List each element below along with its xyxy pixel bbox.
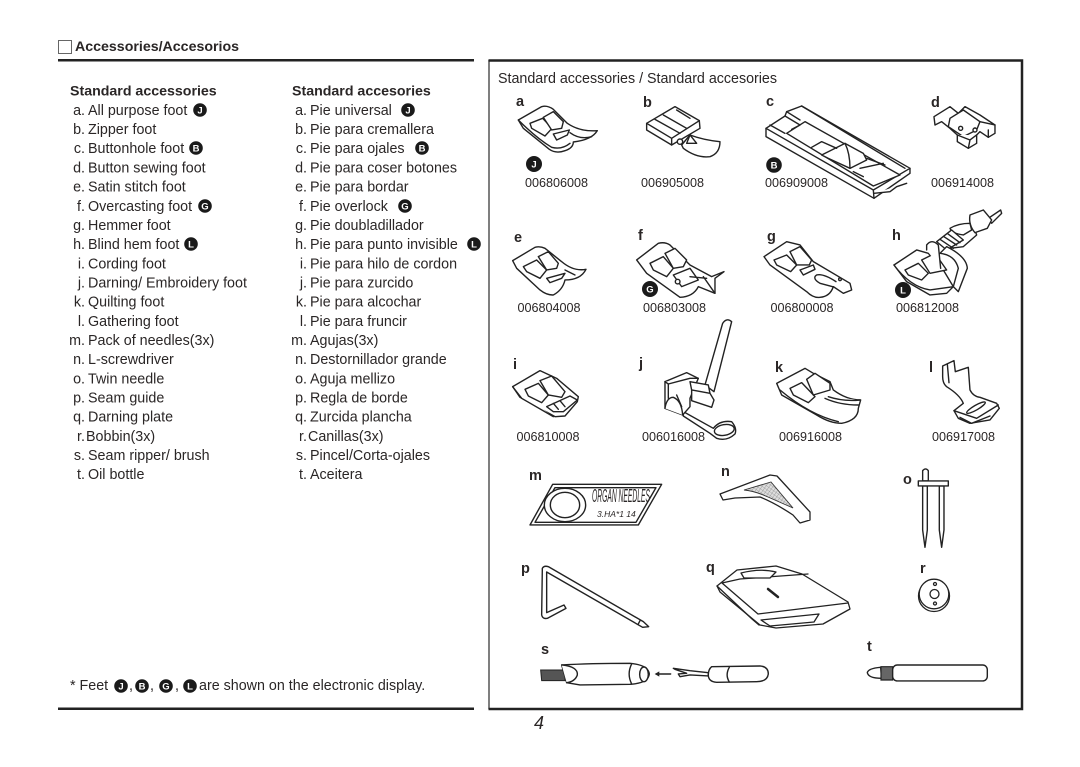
panel: standard accessories illustrations: ORGAN NEEDLES (592, 486, 650, 506)
item d: button sewing foot: 006914008 (931, 176, 994, 190)
item e: satin stitch foot: e (514, 230, 522, 246)
item g: hemmer foot: g (767, 229, 776, 245)
list: Spanish accessories: s. (296, 448, 307, 464)
list: English accessories: Bobbin(3x) (86, 429, 155, 445)
list: English accessories: Zipper foot (88, 122, 156, 138)
page number: 4 (534, 713, 544, 733)
badge L: L (900, 286, 906, 296)
item h: blind hem foot: 006812008 (896, 301, 959, 315)
list: English accessories: L-screwdriver (88, 352, 174, 368)
list: Spanish accessories: r. (299, 429, 307, 445)
list: English accessories: Darning plate (88, 410, 173, 426)
item b: zipper foot: b (643, 95, 652, 111)
list: English accessories: Satin stitch foot (88, 180, 186, 196)
panel: standard accessories illustrations (488, 60, 1022, 709)
list: Spanish accessories: p. (295, 390, 307, 406)
list: Spanish accessories: Aguja mellizo (310, 372, 395, 388)
list: Spanish accessories: i. (300, 256, 307, 272)
top rule (58, 59, 474, 62)
list: Spanish accessories: Pie para punto invisible (310, 237, 458, 253)
list: Spanish accessories: Pie overlock (310, 199, 389, 215)
item n: L-screwdriver: n (721, 464, 730, 480)
item b: zipper foot (641, 95, 720, 190)
list: English accessories: Pack of needles(3x) (88, 333, 214, 349)
list: Spanish accessories: c. (296, 141, 307, 157)
list: Spanish accessories: Pie para hilo de cordon (310, 256, 457, 272)
list: Spanish accessories: Standard accesories (292, 84, 431, 100)
list: English accessories: b. (73, 122, 85, 138)
list: Spanish accessories: k. (296, 294, 307, 310)
list: English accessories: s. (74, 448, 85, 464)
list: English accessories: e. (73, 180, 85, 196)
footnote: B (139, 682, 146, 692)
list: English accessories: a. (73, 103, 85, 119)
list: Spanish accessories (291, 84, 481, 483)
list: English accessories: g. (73, 218, 85, 234)
item d: button sewing foot (931, 95, 995, 190)
item q: darning plate: q (706, 560, 715, 576)
item l: gathering foot: l (929, 360, 933, 376)
item i: cording foot: 006810008 (516, 430, 580, 444)
list: English accessories: i. (78, 256, 85, 272)
list: English accessories: B (193, 144, 200, 154)
list: English accessories: Gathering foot (88, 314, 179, 330)
list: English accessories: t. (77, 467, 85, 483)
badge B: B (771, 160, 778, 172)
item j: darning/embroidery foot: 006016008 (642, 430, 705, 444)
item f: overcasting foot: f (638, 228, 643, 244)
list: English accessories: Oil bottle (88, 467, 144, 483)
list: English accessories: Standard accessories (70, 84, 217, 100)
item m: pack of needles: 3.HA*1 14 (597, 509, 636, 519)
item i: cording foot (513, 357, 580, 444)
list: Spanish accessories: j. (299, 276, 307, 292)
list: English accessories: Hemmer foot (88, 218, 171, 234)
list: Spanish accessories: Canillas(3x) (308, 429, 383, 445)
list: Spanish accessories: b. (295, 122, 307, 138)
item m: pack of needles (529, 468, 662, 525)
list: English accessories: j. (77, 276, 85, 292)
list: English accessories: Seam ripper/ brush (88, 448, 210, 464)
list: Spanish accessories: d. (295, 160, 307, 176)
list: Spanish accessories: o. (295, 372, 307, 388)
item f: overcasting foot (637, 228, 724, 315)
item j: darning/embroidery foot: j (638, 356, 643, 372)
list: Spanish accessories: B (419, 144, 426, 154)
list: Spanish accessories: Pie para alcochar (310, 294, 422, 310)
item g: hemmer foot: 006800008 (770, 301, 834, 315)
item d: button sewing foot: d (931, 95, 940, 111)
heading: accessories: Accessories/Accesorios (75, 39, 239, 55)
footnote: are shown on the electronic display. (199, 678, 425, 694)
item k: quilting foot: k (775, 360, 784, 376)
item l: gathering foot: 006917008 (932, 430, 995, 444)
list: English accessories: J (197, 106, 203, 116)
list: English accessories: q. (73, 410, 85, 426)
list: English accessories: L (188, 240, 194, 250)
item c: buttonhole foot: c (766, 94, 774, 110)
list: Spanish accessories: Pie doubladillador (310, 218, 424, 234)
list: English accessories: o. (73, 372, 85, 388)
item t: oil bottle: t (867, 639, 872, 655)
list: Spanish accessories: Zurcida plancha (310, 410, 412, 426)
footnote: , (129, 678, 133, 694)
list: English accessories: c. (74, 141, 85, 157)
list: English accessories (69, 84, 247, 483)
list: English accessories: h. (73, 237, 85, 253)
item q: darning plate (706, 560, 850, 628)
list: English accessories: k. (74, 294, 85, 310)
item n: L-screwdriver (720, 464, 810, 523)
item c: buttonhole foot (765, 94, 910, 198)
list: English accessories: r. (77, 429, 85, 445)
item i: cording foot: i (513, 357, 517, 373)
footnote: J (118, 682, 124, 692)
list: English accessories: f. (77, 199, 85, 215)
item k: quilting foot (775, 360, 861, 444)
item p: seam guide (521, 561, 649, 627)
list: Spanish accessories: Pie para bordar (310, 180, 409, 196)
item o: twin needle: o (903, 472, 912, 488)
footnote: G (162, 682, 170, 692)
list: English accessories: Seam guide (88, 390, 164, 406)
item a: all purpose foot: a (516, 94, 525, 110)
list: Spanish accessories: Destornillador grande (310, 352, 447, 368)
item a: all purpose foot (516, 94, 597, 190)
item f: overcasting foot: 006803008 (643, 301, 706, 315)
list: English accessories: Darning/ Embroidery foot (88, 276, 247, 292)
list: Spanish accessories: Pie universal (310, 103, 392, 119)
footnote: , (150, 678, 154, 694)
footnote: , (175, 678, 179, 694)
badge B (766, 157, 782, 173)
badge G: G (646, 284, 654, 296)
item r: bobbin: r (920, 561, 926, 577)
list: Spanish accessories: t. (299, 467, 307, 483)
list: Spanish accessories: h. (295, 237, 307, 253)
item s: seam ripper and brush (541, 642, 768, 685)
list: Spanish accessories: Pie para fruncir (310, 314, 407, 330)
item e: satin stitch foot: 006804008 (518, 301, 581, 315)
item b: zipper foot: 006905008 (641, 176, 704, 190)
item o: twin needle (903, 469, 948, 547)
list: Spanish accessories: e. (295, 180, 307, 196)
list: Spanish accessories: G (401, 202, 409, 212)
list: English accessories: l. (78, 314, 85, 330)
list: Spanish accessories: Pie para cremallera (310, 122, 434, 138)
list: Spanish accessories: f. (299, 199, 307, 215)
badge J: J (531, 160, 537, 170)
list: Spanish accessories: Pie para zurcido (310, 276, 413, 292)
list: Spanish accessories: J (405, 106, 411, 116)
list: English accessories: Button sewing foot (88, 160, 206, 176)
list: English accessories: d. (73, 160, 85, 176)
list: Spanish accessories: Aceitera (310, 467, 362, 483)
item e: satin stitch foot (513, 230, 586, 315)
footnote: L (187, 682, 193, 692)
item r: bobbin (918, 561, 950, 612)
list: Spanish accessories: Pincel/Corta-ojales (310, 448, 430, 464)
list: Spanish accessories: l. (300, 314, 307, 330)
list: English accessories: m. (69, 333, 85, 349)
item l: gathering foot (929, 360, 999, 444)
list: Spanish accessories: g. (295, 218, 307, 234)
list: English accessories: p. (73, 390, 85, 406)
panel heading: Standard accessories / Standard accesories (498, 71, 777, 87)
list: English accessories: G (201, 202, 209, 212)
list: Spanish accessories: m. (291, 333, 307, 349)
item t: oil bottle (867, 639, 987, 681)
list: English accessories: All purpose foot (88, 103, 187, 119)
list: Spanish accessories: Pie para coser botones (310, 160, 457, 176)
item m: pack of needles: m (529, 468, 542, 484)
item j: darning/embroidery foot (638, 320, 736, 444)
list: English accessories: Blind hem foot (88, 237, 179, 253)
item h: blind hem foot (892, 210, 1002, 315)
bottom rule (58, 708, 474, 710)
item c: buttonhole foot: 006909008 (765, 176, 828, 190)
list: Spanish accessories: a. (295, 103, 307, 119)
footnote: * Feet (70, 678, 108, 694)
list: English accessories: Quilting foot (88, 294, 164, 310)
list: English accessories: n. (73, 352, 85, 368)
item a: all purpose foot: 006806008 (525, 176, 588, 190)
list: English accessories: Twin needle (88, 372, 164, 388)
list: Spanish accessories: n. (295, 352, 307, 368)
footnote (70, 678, 425, 694)
item h: blind hem foot: h (892, 228, 901, 244)
item s: seam ripper and brush: s (541, 642, 549, 658)
list: English accessories: Overcasting foot (88, 199, 192, 215)
list: Spanish accessories: q. (295, 410, 307, 426)
item k: quilting foot: 006916008 (779, 430, 842, 444)
list: English accessories: Buttonhole foot (88, 141, 184, 157)
list: Spanish accessories: Pie para ojales (310, 141, 405, 157)
list: English accessories: Cording foot (88, 256, 166, 272)
item g: hemmer foot (764, 229, 852, 315)
list: Spanish accessories: Regla de borde (310, 390, 408, 406)
list: Spanish accessories: Agujas(3x) (310, 333, 378, 349)
item p: seam guide: p (521, 561, 530, 577)
list: Spanish accessories: L (471, 240, 477, 250)
